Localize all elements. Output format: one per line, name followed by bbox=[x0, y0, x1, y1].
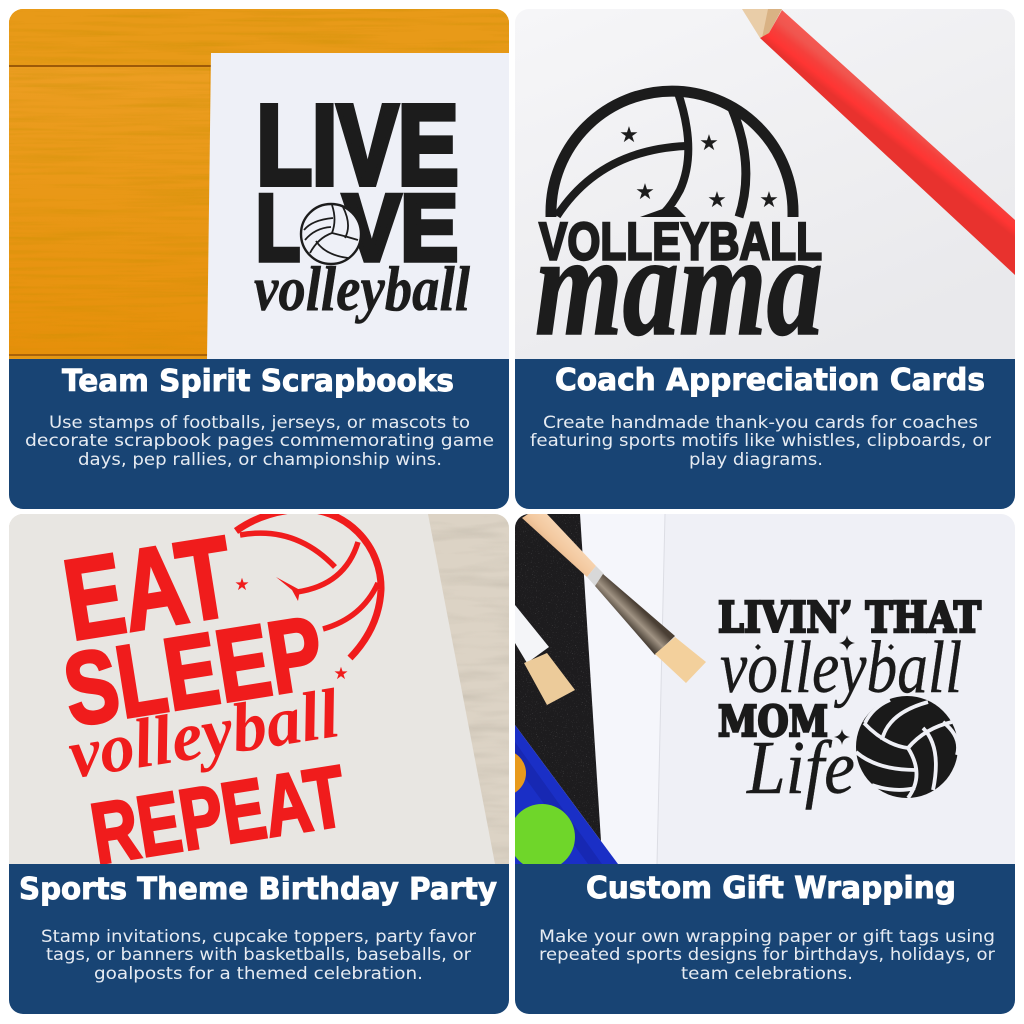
description: play diagrams. bbox=[689, 450, 823, 470]
icon: stars: ★ bbox=[707, 188, 727, 213]
description: Create handmade thank-you cards for coaches bbox=[543, 413, 978, 433]
icon: stars: ★ bbox=[635, 180, 655, 205]
description bbox=[25, 413, 494, 470]
stamp: EAT SLEEP volleyball REPEAT bbox=[56, 509, 381, 883]
stamp: LIVE LOVE volleyball: volleyball bbox=[254, 253, 470, 324]
stamp: half volleyball with stars bbox=[535, 90, 823, 366]
icon: stars: ★ bbox=[759, 188, 779, 213]
photo: wood table with paper bbox=[9, 9, 509, 359]
icon: small brush bbox=[515, 605, 575, 705]
description bbox=[530, 413, 991, 470]
heading: Sports Theme Birthday Party bbox=[19, 872, 497, 907]
stamp: Livin' that volleyball mom life bbox=[718, 593, 981, 810]
icon: stars bbox=[620, 126, 778, 207]
heading: Team Spirit Scrapbooks bbox=[62, 364, 454, 399]
stamp: Livin' that volleyball mom life: MOM bbox=[718, 697, 828, 746]
description: tags, or banners with basketballs, baseballs, or bbox=[46, 945, 471, 965]
heading: Custom Gift Wrapping bbox=[586, 871, 956, 906]
icon: red stars: ★ bbox=[333, 664, 349, 684]
icon: sparkles bbox=[755, 635, 894, 745]
stamp: half volleyball with stars: VOLLEYBALL bbox=[539, 212, 822, 272]
photo: paper with red pencil bbox=[515, 9, 1015, 359]
stamp: Livin' that volleyball mom life: volleyball bbox=[720, 627, 962, 709]
panel: Custom Gift Wrapping bbox=[480, 514, 1015, 870]
icon: red stars: ★ bbox=[234, 575, 250, 595]
stamp: EAT SLEEP volleyball REPEAT: SLEEP bbox=[57, 595, 330, 748]
description: Stamp invitations, cupcake toppers, party favor bbox=[41, 927, 476, 947]
stamp: LIVE LOVE volleyball: LIVE bbox=[256, 82, 458, 208]
stamp: EAT SLEEP volleyball REPEAT: REPEAT bbox=[85, 748, 352, 883]
description: days, pep rallies, or championship wins. bbox=[78, 450, 442, 470]
description: team celebrations. bbox=[681, 964, 853, 984]
stamp: LIVE LOVE volleyball: L bbox=[256, 175, 300, 280]
icon: stars: ★ bbox=[619, 123, 639, 148]
icon: large brush bbox=[522, 514, 706, 683]
stamp: Livin' that volleyball mom life: Life bbox=[746, 726, 855, 810]
heading: Coach Appreciation Cards bbox=[555, 363, 985, 398]
caption bar: Custom Gift Wrapping bbox=[515, 864, 1015, 1014]
description: Use stamps of footballs, jerseys, or mascots to bbox=[49, 413, 470, 433]
caption bar: Coach Appreciation Cards bbox=[515, 359, 1015, 509]
photo: textured paper on wood bbox=[9, 514, 509, 864]
icon: partial volleyball bbox=[236, 509, 381, 658]
icon: volleyball bbox=[301, 204, 361, 264]
stamp: LIVE LOVE volleyball: VE bbox=[343, 175, 458, 280]
stamp: half volleyball with stars: mama bbox=[535, 206, 823, 366]
panel: Team Spirit Scrapbooks bbox=[9, 9, 509, 359]
icon: solid volleyball bbox=[856, 696, 958, 798]
stamp: LIVE LOVE volleyball bbox=[254, 82, 470, 324]
description: repeated sports designs for birthdays, holidays, or bbox=[539, 945, 995, 965]
photo: paints and brushes on paper bbox=[480, 514, 1015, 870]
description bbox=[41, 927, 476, 984]
stamp: Livin' that volleyball mom life: LIVIN’ THAT bbox=[718, 593, 981, 642]
description: goalposts for a themed celebration. bbox=[94, 964, 423, 984]
description: featuring sports motifs like whistles, clipboards, or bbox=[530, 431, 991, 451]
panel: Coach Appreciation Cards bbox=[515, 9, 1015, 366]
description bbox=[540, 929, 995, 979]
description: Make your own wrapping paper or gift tags using bbox=[539, 927, 995, 947]
caption bar: Team Spirit Scrapbooks bbox=[9, 359, 509, 509]
caption bar: Sports Theme Birthday Party bbox=[9, 864, 509, 1014]
icon: stars: ★ bbox=[699, 131, 719, 156]
stamp: EAT SLEEP volleyball REPEAT: EAT bbox=[56, 513, 241, 665]
icon: red stars bbox=[234, 575, 349, 684]
stamp: EAT SLEEP volleyball REPEAT: volleyball bbox=[63, 675, 345, 794]
panel: Sports Theme Birthday Party bbox=[9, 509, 509, 883]
description: decorate scrapbook pages commemorating game bbox=[25, 431, 494, 451]
